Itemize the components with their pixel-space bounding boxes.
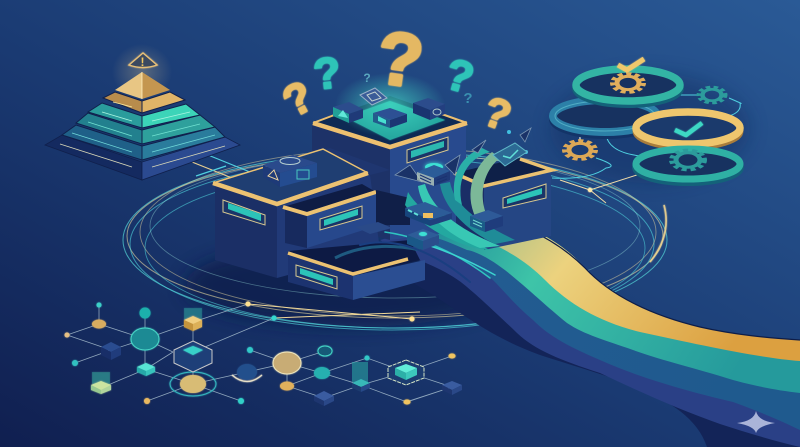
label: rear box <box>407 137 448 163</box>
shards <box>395 128 531 182</box>
flat tile <box>355 222 392 234</box>
band: teal <box>433 212 800 393</box>
question mark teal right: ? <box>440 49 479 104</box>
stream curves <box>360 232 495 282</box>
label: middle drawer <box>320 206 362 230</box>
cube: left box <box>263 155 317 187</box>
question mark teal left: ? <box>311 48 343 99</box>
right box <box>454 158 552 250</box>
network edges <box>67 304 452 402</box>
rim: left box <box>213 148 368 205</box>
check tile <box>493 143 527 166</box>
question mark gold left: ? <box>275 71 322 127</box>
navy cube <box>442 381 462 395</box>
left cube <box>333 102 363 123</box>
warning triangle <box>129 53 157 69</box>
label: left box <box>223 200 265 225</box>
dark cube <box>101 342 121 360</box>
hex teal cube <box>388 360 424 385</box>
left box <box>213 148 390 278</box>
band: gold <box>450 212 800 361</box>
blue cube <box>314 391 334 406</box>
pyramid tier 2 <box>103 92 185 113</box>
band: navy <box>380 212 800 447</box>
rim: rear box <box>313 96 467 148</box>
right cube <box>413 98 445 120</box>
small question mark right: ? <box>463 90 473 107</box>
data stream and blocks <box>355 128 531 282</box>
label: bottom drawer <box>296 265 337 289</box>
pyramid tier 1 <box>115 72 170 99</box>
band: blue <box>417 212 800 430</box>
rim: middle drawer <box>283 184 376 214</box>
pyramid tier 6 <box>45 135 240 180</box>
pyramid tier 3 <box>88 103 200 128</box>
light green cube <box>91 372 111 394</box>
cubes rising from rear box <box>333 73 445 137</box>
question marks <box>275 15 518 140</box>
question mark large gold: ? <box>372 15 428 104</box>
gear: teal bottom <box>672 150 704 170</box>
ring: bottom teal <box>636 149 740 182</box>
middle drawer <box>283 184 376 248</box>
check: teal <box>675 123 702 135</box>
ring: gold <box>636 112 740 147</box>
connector lines from pyramid <box>192 155 250 178</box>
orbit rings <box>123 148 667 330</box>
connector curves <box>552 95 741 178</box>
gear: gold left <box>565 141 595 159</box>
block 4 <box>407 229 439 250</box>
check: gold <box>618 59 644 70</box>
teal cube <box>137 363 155 376</box>
ring: top teal <box>576 69 680 104</box>
bottom drawer <box>288 240 425 300</box>
network <box>64 302 462 406</box>
rim: bottom drawer <box>288 240 420 275</box>
pyramid tier 5 <box>62 125 225 160</box>
block 1 <box>417 163 450 186</box>
warning triangle: ! <box>140 55 144 69</box>
glow <box>335 73 445 137</box>
sparkle star <box>737 411 775 433</box>
ribbon shadow <box>380 250 800 447</box>
hex cube <box>174 341 212 372</box>
gold cube <box>184 308 202 331</box>
floor shadow under boxes <box>185 243 515 327</box>
block 2 <box>405 202 452 226</box>
network nodes <box>64 302 456 404</box>
block 3 <box>470 210 503 232</box>
central dark block <box>376 190 410 225</box>
ribbon dark edge <box>500 218 800 340</box>
gear: gold top <box>613 74 643 92</box>
label: right box <box>503 184 546 208</box>
small question mark: ? <box>363 71 371 85</box>
rim: right box <box>454 158 552 188</box>
pyramid tier 4 <box>76 113 215 144</box>
ring: blue <box>553 100 657 135</box>
middle cube <box>373 108 407 128</box>
pyramid <box>45 44 240 180</box>
ribbon of data <box>380 212 800 447</box>
column cube <box>352 362 370 392</box>
rear stack box <box>312 96 467 240</box>
checklist rings <box>550 59 750 203</box>
question mark gold right: ? <box>477 87 518 140</box>
filled stream swooshes <box>405 148 515 250</box>
tile <box>360 88 387 105</box>
gear: teal right <box>699 87 725 103</box>
